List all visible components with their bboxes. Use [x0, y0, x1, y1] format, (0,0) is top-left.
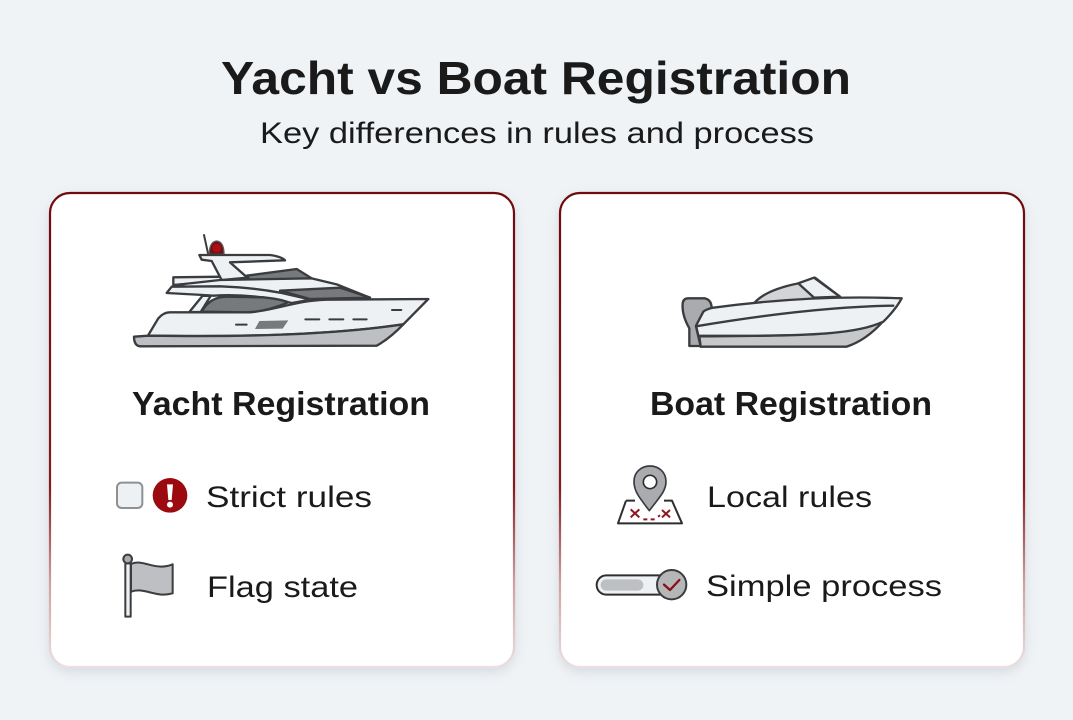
subtitle: Key differences in rules and process	[260, 117, 814, 150]
label: flag state: Flag state	[207, 571, 358, 604]
icon: boat	[683, 278, 902, 347]
icon: yacht	[134, 235, 428, 346]
icon: toggle with check	[597, 570, 686, 599]
icon: checkbox and warning	[117, 478, 187, 513]
heading: boat registration: Boat Registration	[650, 385, 932, 422]
panel: boat registration	[560, 193, 1024, 671]
icon: map pin	[618, 466, 682, 523]
heading: yacht registration: Yacht Registration	[132, 385, 430, 422]
icon: flag	[123, 555, 173, 617]
label: strict rules: Strict rules	[206, 481, 372, 514]
label: local rules: Local rules	[707, 481, 872, 514]
panel: yacht registration	[50, 193, 514, 671]
title: Yacht vs Boat Registration	[221, 52, 851, 104]
label: simple process: Simple process	[706, 570, 942, 603]
